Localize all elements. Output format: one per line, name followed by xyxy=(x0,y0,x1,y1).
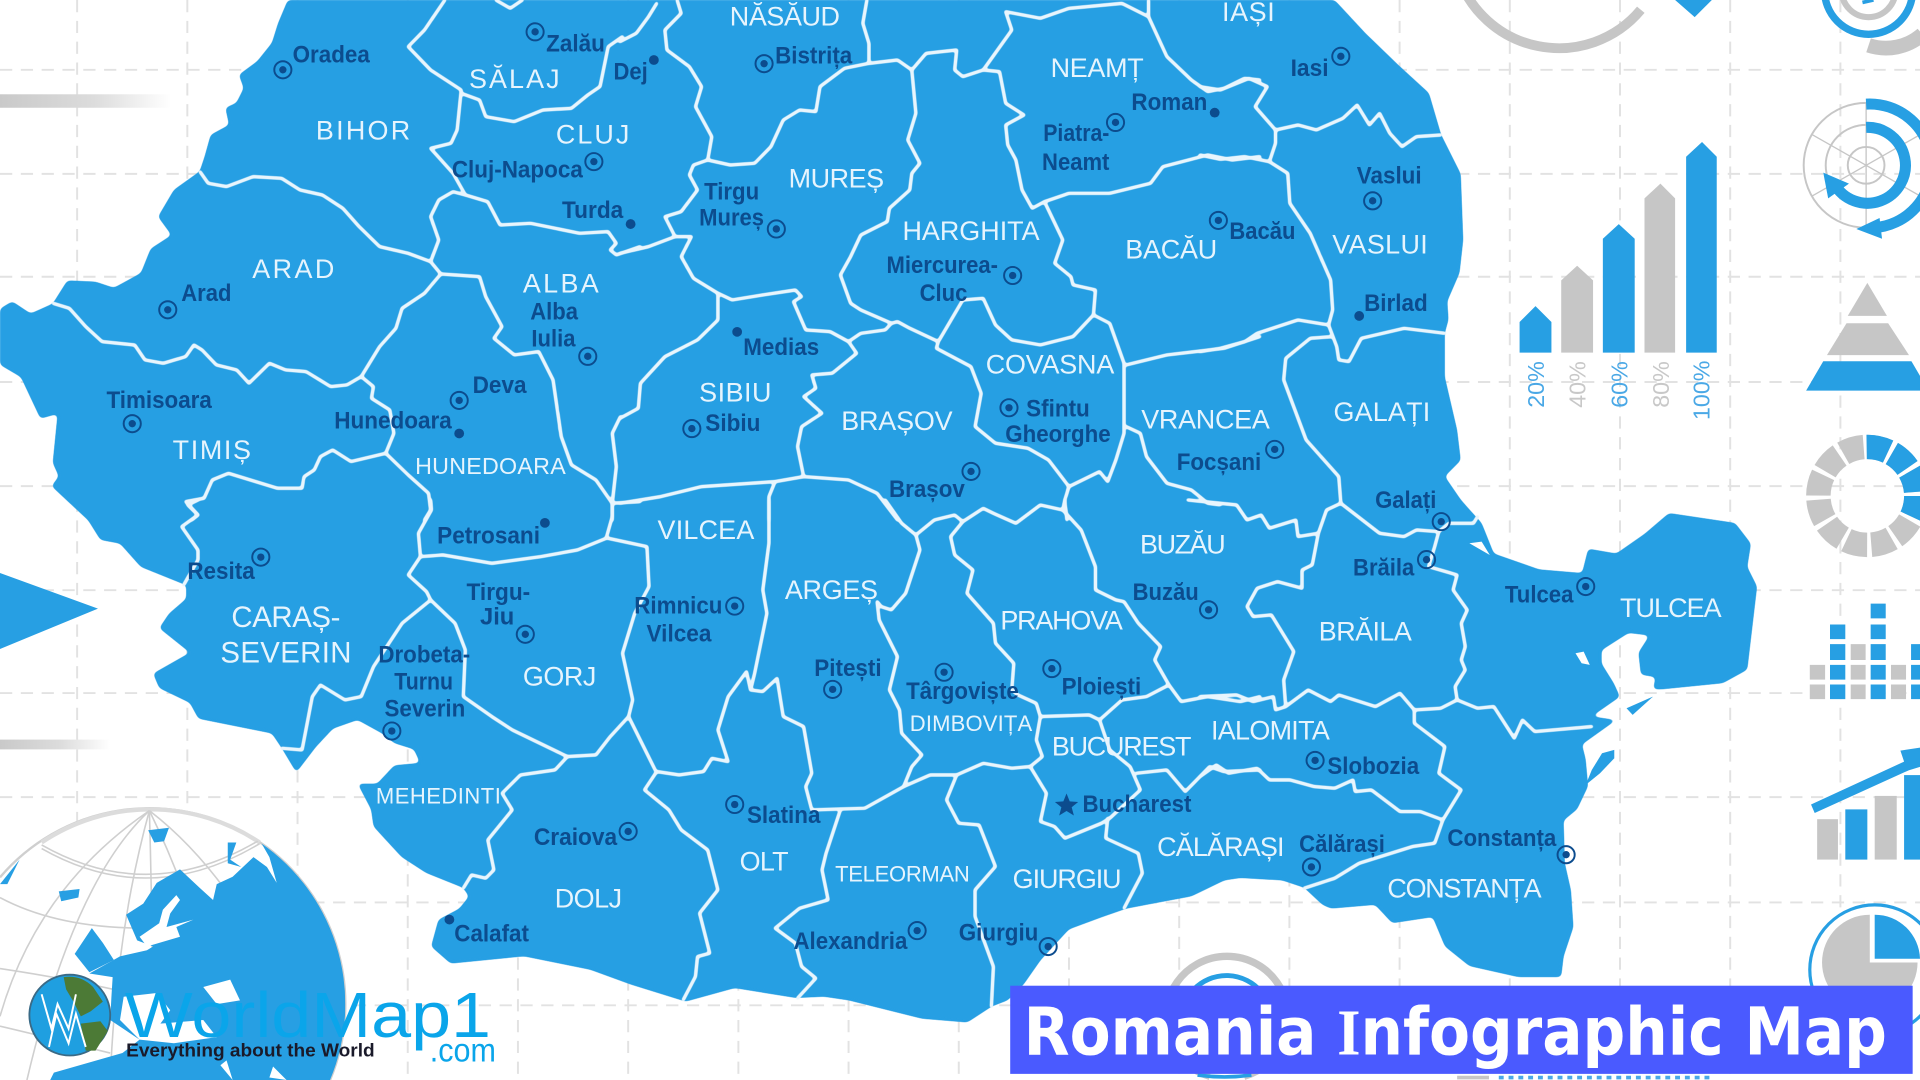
county: Ialomita: IALOMITA xyxy=(1211,716,1330,746)
city: Hunedoara: Hunedoara xyxy=(334,408,452,435)
city: Brasov: Brașov xyxy=(889,476,965,503)
city: Bacau xyxy=(1210,212,1296,245)
county: Alba: ALBA xyxy=(523,269,599,299)
logo domain: .com xyxy=(430,1033,496,1070)
county: Giurgiu: GIURGIU xyxy=(1013,864,1122,894)
county: Bacau: BACĂU xyxy=(1125,234,1217,264)
city: Cluj-Napoca: Cluj-Napoca xyxy=(452,157,583,184)
county: Harghita: HARGHITA xyxy=(902,216,1040,246)
city: Sfintu Gheorghe xyxy=(1000,395,1111,448)
city: Timisoara: Timisoara xyxy=(107,387,212,414)
city: Turda: Turda xyxy=(562,197,624,224)
county: Caras: CARAȘ- xyxy=(231,601,340,634)
county: Constanta: CONSTANȚA xyxy=(1387,874,1542,904)
city: Calafat: Calafat xyxy=(454,921,529,948)
city: Medias: Medias xyxy=(743,334,819,361)
county: Vaslui: VASLUI xyxy=(1332,229,1428,259)
city: Galati: Galați xyxy=(1375,487,1436,514)
city: Calarasi: Călărași xyxy=(1299,831,1385,858)
city: Giurgiu xyxy=(959,919,1057,955)
bar chart with percentage labels: 60% xyxy=(1606,361,1632,408)
city: Slobozia: Slobozia xyxy=(1327,753,1420,780)
city: Bucharest with capital star: Bucharest xyxy=(1082,791,1191,818)
bar chart with percentage labels: 20% xyxy=(1523,361,1549,408)
city: Tirgu-Jiu: Jiu xyxy=(480,603,514,630)
city: Sfintu Gheorghe: Gheorghe xyxy=(1005,421,1111,448)
county: Teleorman: TELEORMAN xyxy=(835,862,970,887)
lagoon islands xyxy=(1469,542,1653,785)
city: Resita xyxy=(187,549,269,585)
bar chart with percentage labels: 40% xyxy=(1565,361,1591,408)
city: Drobeta-Turnu Severin: Severin xyxy=(384,695,465,722)
bar chart with percentage labels xyxy=(1520,142,1717,420)
city: Giurgiu: Giurgiu xyxy=(959,919,1038,946)
city: Slatina xyxy=(726,796,821,829)
county: Buzau: BUZĂU xyxy=(1140,529,1226,559)
icon: radar circle with arrows xyxy=(1804,103,1920,239)
county: Bihor: BIHOR xyxy=(316,116,410,146)
county: Arges: ARGEȘ xyxy=(785,575,878,605)
icon: segmented donut xyxy=(1818,447,1916,545)
icon: concentric rings top right xyxy=(1824,0,1920,48)
city: Tirgu-Jiu: Tirgu- xyxy=(467,579,530,606)
city: Tulcea: Tulcea xyxy=(1505,581,1574,608)
city: Miercurea-Ciuc: Miercurea- xyxy=(887,252,998,279)
county: Vilcea: VILCEA xyxy=(658,515,754,545)
city: Slatina: Slatina xyxy=(747,802,821,829)
city: Drobeta-Turnu Severin: Turnu xyxy=(394,668,453,695)
county: Cluj: CLUJ xyxy=(556,119,629,149)
city: Bistrita xyxy=(756,43,853,72)
city: Rimnicu Vilcea: Rimnicu xyxy=(634,592,722,619)
city: Tirgu Mures: Mureș xyxy=(699,204,764,231)
city: Piatra-Neamt: Neamt xyxy=(1042,149,1109,176)
city: Roman: Roman xyxy=(1131,89,1207,116)
county names xyxy=(173,0,1722,913)
logo tagline: Everything about the World xyxy=(126,1040,375,1061)
city: Tirgu-Jiu xyxy=(467,579,534,643)
city: Zalau: Zalău xyxy=(546,30,605,57)
county: Braila: BRĂILA xyxy=(1319,616,1412,646)
city: Calarasi xyxy=(1299,831,1385,876)
city: Targoviste: Târgoviște xyxy=(906,678,1019,705)
city: Bistrita: Bistrița xyxy=(775,43,853,70)
city: Targoviste xyxy=(906,664,1019,705)
title banner: Romania Infographic Map xyxy=(1024,993,1887,1070)
city: Braila: Brăila xyxy=(1353,555,1415,582)
county: Arad: ARAD xyxy=(252,254,334,284)
county: Galati: GALAȚI xyxy=(1333,397,1430,427)
county: Calarasi: CĂLĂRAȘI xyxy=(1157,832,1284,862)
city: Piatra-Neamt: Piatra- xyxy=(1043,120,1109,147)
icon: pyramid xyxy=(1806,283,1920,391)
city: Birlad: Birlad xyxy=(1364,290,1428,317)
city: Deva: Deva xyxy=(473,372,527,399)
city: Tirgu Mures: Tirgu xyxy=(704,179,759,206)
blue triangle left edge xyxy=(0,573,98,649)
city: Dej: Dej xyxy=(613,59,648,86)
city: Arad xyxy=(159,280,231,318)
city: Alexandria: Alexandria xyxy=(793,928,908,955)
county: Timis: TIMIȘ xyxy=(173,435,251,465)
city: Zalau xyxy=(527,23,605,57)
county: Prahova: PRAHOVA xyxy=(1000,605,1123,635)
city: Vaslui: Vaslui xyxy=(1357,163,1422,190)
city: Medias xyxy=(732,327,819,361)
city: Focsani xyxy=(1177,441,1283,476)
continents xyxy=(50,840,355,1080)
logo globe icon xyxy=(29,975,110,1056)
city: Miercurea-Ciuc: Cluc xyxy=(920,280,967,307)
city: Miercurea-Ciuc xyxy=(887,252,1021,307)
county: Neamt: NEAMȚ xyxy=(1051,53,1144,83)
county: Bucurest: BUCUREST xyxy=(1052,732,1191,762)
county: Brasov: BRAȘOV xyxy=(841,406,953,436)
county: Sibiu: SIBIU xyxy=(699,378,771,408)
city: Ploiesti xyxy=(1043,660,1141,700)
city: Bacau: Bacău xyxy=(1229,218,1296,245)
city labels and markers xyxy=(107,23,1594,955)
city: Arad: Arad xyxy=(181,280,231,307)
icon: growth chart with arrow xyxy=(1811,747,1920,860)
city: Constanta: Constanța xyxy=(1447,825,1557,852)
county: Olt: OLT xyxy=(740,847,789,877)
county: Tulcea: TULCEA xyxy=(1620,593,1722,623)
bar chart with percentage labels: 80% xyxy=(1648,361,1674,408)
county: Covasna: COVASNA xyxy=(986,349,1114,379)
county: Dolj: DOLJ xyxy=(555,883,622,913)
city: Oradea xyxy=(274,41,370,78)
city: Ploiesti: Ploiești xyxy=(1062,673,1141,700)
city: Focsani: Focșani xyxy=(1177,449,1261,476)
globe xyxy=(0,808,355,1080)
logo: WorldMap1 xyxy=(29,975,496,1070)
city: Vaslui xyxy=(1357,163,1422,209)
county: Nasaud: NĂSĂUD xyxy=(730,2,840,32)
city: Alba Iulia: Alba xyxy=(530,299,578,326)
city: Resita: Resita xyxy=(187,558,255,585)
city: Alba Iulia xyxy=(530,299,596,365)
county: Mures: MUREȘ xyxy=(789,163,884,193)
city: Timisoara xyxy=(107,387,212,432)
city: Alba Iulia: Iulia xyxy=(531,326,576,353)
city: Iasi xyxy=(1291,48,1349,82)
county: Severin: SEVERIN xyxy=(220,636,351,669)
city: Buzau: Buzău xyxy=(1133,579,1199,606)
blurred gray bar upper left xyxy=(0,94,171,108)
city: Pitesti xyxy=(814,655,882,698)
city: Brasov xyxy=(889,463,980,503)
right side infographic: gray arc and diamond at top xyxy=(1457,0,1712,48)
county: Hunedoara: HUNEDOARA xyxy=(415,453,566,479)
county: Salaj: SĂLAJ xyxy=(469,64,560,94)
city: Drobeta-Turnu Severin xyxy=(378,641,470,740)
city: Sibiu xyxy=(683,410,760,437)
city: Constanta xyxy=(1447,825,1575,863)
city: Rimnicu Vilcea xyxy=(634,592,743,648)
county: Gorj: GORJ xyxy=(523,662,596,692)
city: Pitesti: Pitești xyxy=(814,655,882,682)
city: Piatra-Neamt xyxy=(1042,114,1124,176)
county: Dimbovita: DIMBOVIȚA xyxy=(910,711,1033,736)
city: Petrosani: Petrosani xyxy=(437,523,540,550)
icon: gray ring behind title xyxy=(1166,956,1713,1078)
county: Mehedinti: MEHEDINTI xyxy=(376,783,501,808)
city: Rimnicu Vilcea: Vilcea xyxy=(647,621,712,648)
county borders xyxy=(53,0,1592,1007)
city: Sibiu: Sibiu xyxy=(705,410,760,437)
city: Tirgu Mures xyxy=(699,179,785,238)
bar chart with percentage labels: 100% xyxy=(1688,361,1714,420)
blurred gray bar lower left xyxy=(0,740,110,749)
icon: pie chart xyxy=(1810,905,1920,1035)
city: Drobeta-Turnu Severin: Drobeta- xyxy=(378,641,470,668)
city: Calafat xyxy=(444,915,529,948)
logo wordmark: WorldMap1 xyxy=(125,980,491,1051)
city: Sfintu Gheorghe: Sfintu xyxy=(1026,395,1090,422)
city: Oradea: Oradea xyxy=(293,41,370,68)
icon: equalizer blocks xyxy=(1810,604,1920,699)
city: Craiova: Craiova xyxy=(534,824,618,851)
city: Buzau xyxy=(1133,579,1217,618)
city: Iasi: Iasi xyxy=(1291,55,1329,82)
city: Deva xyxy=(451,372,527,409)
city: Galati xyxy=(1375,487,1450,530)
county: Vrancea: VRANCEA xyxy=(1141,405,1270,435)
